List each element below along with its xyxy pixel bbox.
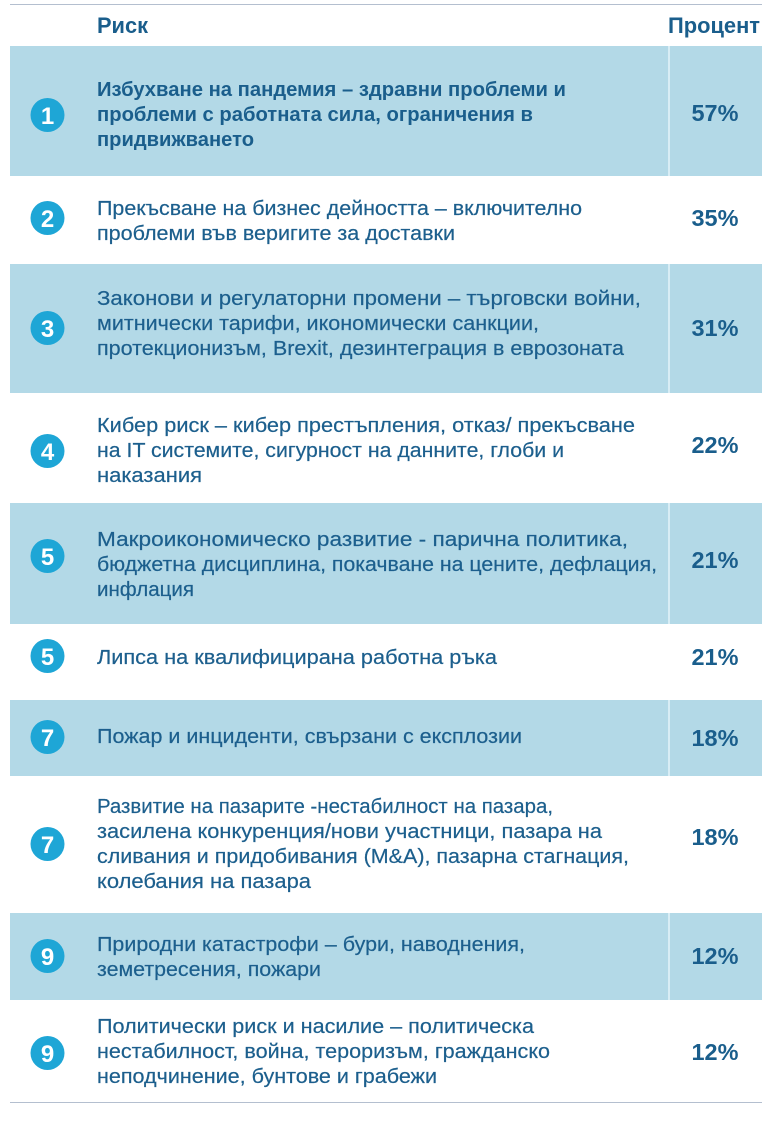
row 4: cyber risk: 4 <box>41 439 55 466</box>
row 2: business interruption: Прекъсване на бизнес дейността – включително <box>97 198 582 220</box>
row 10: political risk and violence: нестабилност, война, тероризъм, гражданско <box>97 1041 550 1063</box>
row 10: political risk and violence: 12% <box>692 1039 738 1065</box>
row 7: fire and explosions: 18% <box>692 725 738 751</box>
row 6: skilled labour shortage <box>30 639 738 673</box>
row 10: political risk and violence: 9 <box>41 1041 54 1068</box>
row 6: skilled labour shortage: 5 <box>41 644 54 671</box>
row 10: political risk and violence <box>30 1016 738 1088</box>
column heading: percent: Процент <box>668 13 760 38</box>
row 5: macroeconomic developments <box>10 503 762 624</box>
row 3: legal and regulatory changes: протекционизъм, Brexit, дезинтеграция в еврозоната <box>97 338 625 360</box>
row 1: pandemic: проблеми с работната сила, ограничения в <box>97 104 533 126</box>
row 3: legal and regulatory changes: 31% <box>692 315 738 341</box>
row 6: skilled labour shortage: 21% <box>692 644 738 670</box>
row 1: pandemic: Избухване на пандемия – здравни проблеми и <box>97 79 566 101</box>
row 7: fire and explosions <box>10 700 762 776</box>
row 10: political risk and violence: неподчинение, бунтове и грабежи <box>97 1066 437 1088</box>
row 8: market developments: 18% <box>692 824 738 850</box>
row 9: natural catastrophes: 9 <box>41 944 54 971</box>
row 1: pandemic: придвижването <box>97 129 254 151</box>
row 1: pandemic: 57% <box>692 100 738 126</box>
row 2: business interruption: 35% <box>692 205 738 231</box>
row 4: cyber risk: 22% <box>692 432 738 458</box>
row 8: market developments: засилена конкуренция/нови участници, пазара на <box>97 821 603 843</box>
row 4: cyber risk <box>30 415 738 487</box>
row 1: pandemic: 1 <box>41 103 54 130</box>
row 2: business interruption: проблеми във веригите за доставки <box>97 223 455 245</box>
row 9: natural catastrophes: Природни катастрофи – бури, наводнения, <box>97 934 525 956</box>
row 5: macroeconomic developments: инфлация <box>97 579 194 601</box>
row 8: market developments: Развитие на пазарите -нестабилност на пазара, <box>97 796 553 818</box>
row 7: fire and explosions: Пожар и инциденти, свързани с експлозии <box>97 726 522 748</box>
row 10: political risk and violence: Политически риск и насилие – политическа <box>97 1016 535 1038</box>
row 8: market developments: сливания и придобивания (M&A), пазарна стагнация, <box>97 846 629 868</box>
row 8: market developments: 7 <box>41 832 54 859</box>
row 3: legal and regulatory changes <box>10 264 762 393</box>
row 5: macroeconomic developments: 21% <box>692 547 738 573</box>
row 5: macroeconomic developments: Макроикономическо развитие - парична политика, <box>97 529 628 551</box>
row 3: legal and regulatory changes: митнически тарифи, икономически санкции, <box>97 313 539 335</box>
table header <box>97 13 760 38</box>
row 1: pandemic <box>10 46 762 176</box>
row 4: cyber risk: на IT системите, сигурност на данните, глоби и <box>97 440 564 462</box>
row 9: natural catastrophes: земетресения, пожари <box>97 959 321 981</box>
row 2: business interruption <box>30 198 738 245</box>
row 7: fire and explosions: 7 <box>41 725 54 752</box>
row 5: macroeconomic developments: бюджетна дисциплина, покачване на цените, дефлация, <box>97 554 657 576</box>
row 5: macroeconomic developments: 5 <box>41 544 54 571</box>
row 6: skilled labour shortage: Липса на квалифицирана работна ръка <box>97 647 498 669</box>
row 4: cyber risk: наказания <box>97 465 202 487</box>
column heading: risk: Риск <box>97 13 149 38</box>
row 8: market developments: колебания на пазара <box>97 871 312 893</box>
row 8: market developments <box>30 796 738 893</box>
row 3: legal and regulatory changes: Законови и регулаторни промени – търговски войни, <box>97 288 641 310</box>
row 9: natural catastrophes <box>10 913 762 1000</box>
row 9: natural catastrophes: 12% <box>692 943 738 969</box>
row 2: business interruption: 2 <box>41 206 54 233</box>
row 4: cyber risk: Кибер риск – кибер престъпления, отказ/ прекъсване <box>97 415 635 437</box>
row 3: legal and regulatory changes: 3 <box>41 316 54 343</box>
